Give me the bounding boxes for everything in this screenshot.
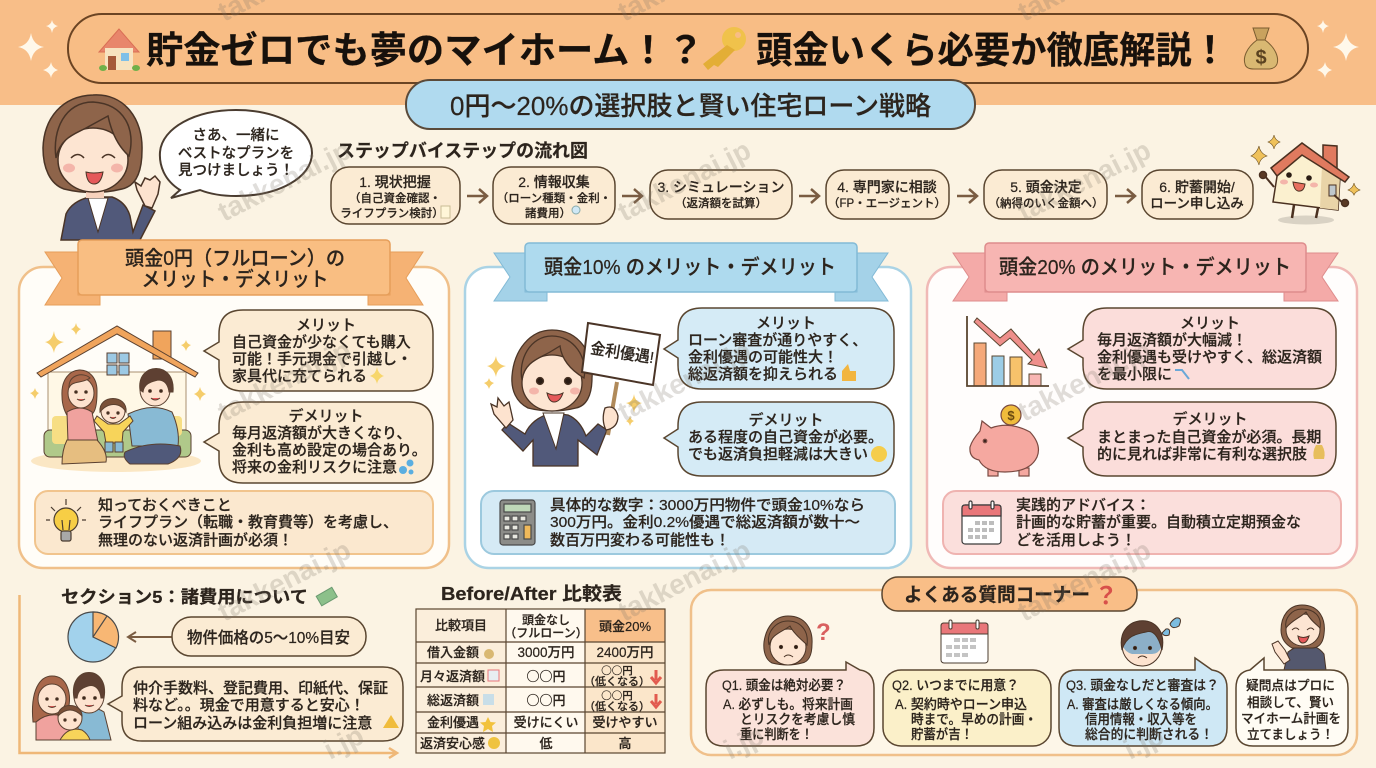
FAQ heading pill: よくある質問コーナー <box>904 584 1090 606</box>
watermarks: takkenai.jp <box>613 134 756 227</box>
step 1: （自己資金確認・ <box>349 191 441 205</box>
merit bubble <box>1068 308 1336 389</box>
comparison table: ○○円 <box>526 690 566 709</box>
merit bubble: 毎月返済額が大幅減！ <box>1097 331 1247 349</box>
Q1 card: A. 必ずしも。将来計画 <box>723 697 853 712</box>
panel: FAQ <box>691 577 1357 755</box>
comparison table: （フルローン） <box>504 626 588 640</box>
watermarks: takkenai.jp <box>613 334 756 427</box>
Q2 card: A. 契約時やローン申込 <box>895 697 1027 712</box>
demerit bubble: 的に見れば非常に有利な選択肢 <box>1097 446 1307 463</box>
watermarks: takkenai.jp <box>213 534 356 627</box>
panel: 頭金10% <box>465 243 911 568</box>
Q1 card <box>706 662 874 746</box>
step 3: 3. シミュレーション <box>657 179 785 195</box>
sparkles right <box>1317 20 1359 78</box>
watermarks <box>213 0 1169 765</box>
FAQ heading pill: ？ <box>1094 583 1118 610</box>
speech bubble: greeting: 見つけましょう！ <box>178 162 294 179</box>
step 5 <box>984 170 1107 219</box>
demerit bubble <box>204 402 433 483</box>
Q2 card <box>883 670 1051 746</box>
icon: light bulb <box>46 499 86 541</box>
comparison table: ○○円 <box>601 688 633 703</box>
example box: 数百万円変わる可能性も！ <box>550 532 730 549</box>
advice box <box>943 491 1341 554</box>
arrow 1-2 <box>467 189 487 203</box>
table heading: Before/After 比較表 <box>441 584 622 604</box>
title text part 2: 頭金いくら必要か徹底解説！ <box>756 30 1228 71</box>
family illustration <box>31 326 201 472</box>
demerit bubble <box>664 402 894 476</box>
ribbon heading: 頭金20% のメリット・デメリット <box>999 255 1291 279</box>
demerit bubble: デメリット <box>748 411 824 429</box>
demerit bubble: 将来の金利リスクに注意 <box>232 459 397 476</box>
advice bubble: 相談して、賢い <box>1247 695 1334 710</box>
icon: key <box>703 27 746 70</box>
FAQ heading pill <box>882 577 1137 611</box>
ribbon heading: 頭金10% のメリット・デメリット <box>544 255 836 279</box>
demerit bubble <box>1068 402 1336 476</box>
merit bubble: 金利優遇も受けやすく、総返済額 <box>1097 348 1322 366</box>
bubble: costs <box>108 667 403 741</box>
ribbon heading <box>953 243 1338 301</box>
arrow: pill to pie <box>128 632 172 642</box>
step 3 <box>650 170 792 219</box>
speech bubble: greeting <box>160 110 312 198</box>
ribbon heading <box>494 243 888 301</box>
merit bubble: 家具代に充てられる <box>232 368 367 385</box>
pill: 物件価格の5〜10%目安 <box>172 617 366 656</box>
piggy bank <box>970 405 1038 476</box>
sparkles <box>484 356 642 426</box>
comparison table: 頭金なし <box>522 612 570 627</box>
step 4: （FP・エージェント） <box>828 197 946 210</box>
comparison table: ○○円 <box>526 666 566 685</box>
advice box: 実践的アドバイス： <box>1016 497 1151 514</box>
icon: house <box>99 29 140 71</box>
Q2 card: 時まで。早めの計画・ <box>911 712 1037 727</box>
title text part 1: 貯金ゼロでも夢のマイホーム！？ <box>146 30 704 71</box>
watermarks: takkenai.jp <box>213 134 356 227</box>
advisor woman <box>1272 605 1326 670</box>
bubble: costs: ローン組み込みは金利負担増に注意 <box>133 714 372 732</box>
advice box: 計画的な貯蓄が重要。自動積立定期預金な <box>1016 513 1301 531</box>
demerit bubble: まとまった自己資金が必須。長期 <box>1097 428 1321 446</box>
icon: money bag: $ <box>1255 47 1267 69</box>
merit bubble: ローン審査が通りやすく、 <box>688 331 867 349</box>
family portrait <box>32 672 111 740</box>
step 2 <box>493 167 615 224</box>
step 1 <box>331 167 460 224</box>
arrow 5-6 <box>1115 189 1135 203</box>
step 5: 5. 頭金決定 <box>1010 179 1082 195</box>
calendar icon <box>941 620 988 663</box>
section 5 heading: セクション5：諸費用について <box>61 587 308 607</box>
comparison table: 月々返済額 <box>420 669 485 684</box>
worried man <box>1121 618 1180 666</box>
comparison table: 受けやすい <box>592 715 658 730</box>
sparkles around mascot <box>1251 135 1360 195</box>
Q2 card: 貯蓄が吉！ <box>911 726 973 742</box>
step 2: 諸費用） <box>525 206 571 220</box>
piggy bank: $ <box>1007 408 1015 423</box>
watermarks: i.jp <box>719 719 769 765</box>
worried woman: ? <box>816 619 831 646</box>
comparison table: 借入金額 <box>427 645 479 660</box>
woman holding sign <box>491 330 618 466</box>
advice bubble: マイホーム計画を <box>1241 711 1341 726</box>
step 3: （返済額を試算） <box>675 196 767 210</box>
watermarks: takkenai.jp <box>613 534 756 627</box>
step 4 <box>826 170 949 219</box>
comparison table: 高 <box>618 736 632 751</box>
demerit bubble: 毎月返済額が大きくなり、 <box>232 424 411 442</box>
step 1: 1. 現状把握 <box>359 174 431 190</box>
falling bar chart <box>967 316 1049 386</box>
house mascot <box>1260 143 1349 224</box>
note box: ライフプラン（転職・教育費等）を考慮し、 <box>98 513 398 531</box>
icon: money <box>316 587 337 606</box>
ribbon heading: メリット・デメリット <box>142 267 328 291</box>
merit bubble <box>664 308 894 389</box>
note box: 知っておくべきこと <box>98 497 232 514</box>
merit bubble: メリット <box>296 317 356 334</box>
advice bubble <box>1236 658 1348 746</box>
demerit bubble: デメリット <box>1172 410 1248 428</box>
step 6 <box>1142 170 1253 219</box>
Q3 card <box>1059 658 1227 746</box>
Q3 card: 信用情報・収入等を <box>1085 711 1197 727</box>
bubble: costs: 仲介手数料、登記費用、印紙代、保証 <box>133 680 388 697</box>
watermarks: i.jp <box>319 719 369 765</box>
step 6: ローン申し込み <box>1150 196 1244 211</box>
comparison table: 金利優遇 <box>427 715 479 730</box>
presenter woman <box>43 95 160 240</box>
note box <box>35 491 433 554</box>
step 2: 2. 情報収集 <box>518 174 590 190</box>
speech bubble: greeting: ベストなプランを <box>178 145 294 162</box>
comparison table <box>416 609 665 753</box>
comparison table: 低 <box>539 736 553 751</box>
comparison table: 2400万円 <box>596 645 654 660</box>
advice box: どを活用しよう！ <box>1016 532 1136 549</box>
merit bubble: メリット <box>1180 315 1240 332</box>
Q1 card: Q1. 頭金は絶対必要？ <box>722 677 846 693</box>
comparison table: 返済安心感 <box>420 736 485 751</box>
demerit bubble: 金利も高め設定の場合あり。 <box>232 442 427 459</box>
merit bubble: メリット <box>756 315 816 332</box>
step 6: 6. 貯蓄開始/ <box>1159 179 1235 195</box>
comparison table: 比較項目 <box>435 618 487 633</box>
Q2 card: Q2. いつまでに用意？ <box>892 678 1019 693</box>
merit bubble: 可能！手元現金で引越し・ <box>232 351 412 368</box>
watermarks: i.jp <box>1119 719 1169 765</box>
comparison table: 頭金20% <box>599 619 651 634</box>
comparison table: 受けにくい <box>514 715 578 730</box>
Q3 card: 総合的に判断される！ <box>1085 727 1213 742</box>
ribbon heading: 頭金0円（フルローン）の <box>125 247 345 270</box>
icon: money bag <box>1244 28 1278 69</box>
steps heading: ステップバイステップの流れ図 <box>337 141 588 161</box>
demerit bubble: でも返済負担軽減は大きい <box>688 446 868 463</box>
arrow 4-5 <box>957 189 977 203</box>
example box <box>481 491 895 554</box>
sparkles left <box>18 20 58 78</box>
comparison table: 3000万円 <box>517 645 575 660</box>
demerit bubble: ある程度の自己資金が必要。 <box>688 428 883 446</box>
icon: calculator <box>500 500 535 545</box>
example box: 具体的な数字：3000万円物件で頭金10%なら <box>550 497 865 514</box>
sign: 金利優遇 <box>582 323 660 385</box>
watermarks: takkenai.jp <box>1013 534 1156 627</box>
sparkles near house <box>30 323 206 401</box>
subtitle pill: 0円〜20%の選択肢と賢い住宅ローン戦略 <box>450 91 931 121</box>
comparison table: 総返済額 <box>427 693 479 708</box>
icon: calendar <box>962 501 1001 544</box>
comparison table: （低くなる） <box>584 674 650 688</box>
ribbon heading <box>45 240 423 305</box>
Q1 card: 重に判断を！ <box>740 727 813 742</box>
step 5: （納得のいく金額へ） <box>988 196 1104 210</box>
title banner <box>68 14 1308 83</box>
merit bubble: を最小限に <box>1097 366 1172 383</box>
arrow 3-4 <box>799 189 819 203</box>
watermarks: takkenai.jp <box>213 334 356 427</box>
Q3 card: A. 審査は厳しくなる傾向。 <box>1067 696 1218 712</box>
note box: 無理のない返済計画が必須！ <box>98 531 293 549</box>
Q1 card: とリスクを考慮し慎 <box>740 711 855 727</box>
panel: 頭金0円 <box>19 240 449 568</box>
merit bubble: 自己資金が少なくても購入 <box>232 333 411 351</box>
panel: 頭金20% <box>927 243 1357 568</box>
arrow 2-3 <box>622 189 642 203</box>
L-shaped arrow frame <box>20 595 397 758</box>
merit bubble <box>204 310 433 391</box>
step flow <box>331 167 1253 224</box>
merit bubble: 総返済額を抑えられる <box>688 366 838 383</box>
Q3 card: Q3. 頭金なしだと審査は？ <box>1066 678 1219 693</box>
comparison table: （低くなる） <box>584 699 650 713</box>
pie chart <box>68 612 119 662</box>
watermarks: takkenai.jp <box>1013 334 1156 427</box>
speech bubble: greeting: さあ、一緒に <box>192 127 280 144</box>
step 1: ライフプラン検討） <box>340 206 444 220</box>
sign: 金利優遇: 金利優遇! <box>589 339 655 367</box>
demerit bubble: デメリット <box>288 407 364 425</box>
example box: 300万円。金利0.2%優遇で総返済額が数十〜 <box>550 513 860 531</box>
worried woman <box>764 616 831 665</box>
bubble: costs: 料など。。現金で用意すると安心！ <box>133 697 365 714</box>
step 2: （ローン種類・金利・ <box>497 191 611 205</box>
step 4: 4. 専門家に相談 <box>837 179 937 195</box>
watermarks: takkenai.jp <box>1013 134 1156 227</box>
comparison table: ○○円 <box>601 663 633 678</box>
pill: 物件価格の5〜10%目安: 物件価格の5〜10%目安 <box>187 629 350 647</box>
subtitle pill <box>406 80 975 129</box>
header band <box>0 0 1376 105</box>
advice bubble: 疑問点はプロに <box>1246 678 1335 693</box>
advice bubble: 立てましょう！ <box>1247 727 1334 742</box>
merit bubble: 金利優遇の可能性大！ <box>688 349 838 366</box>
